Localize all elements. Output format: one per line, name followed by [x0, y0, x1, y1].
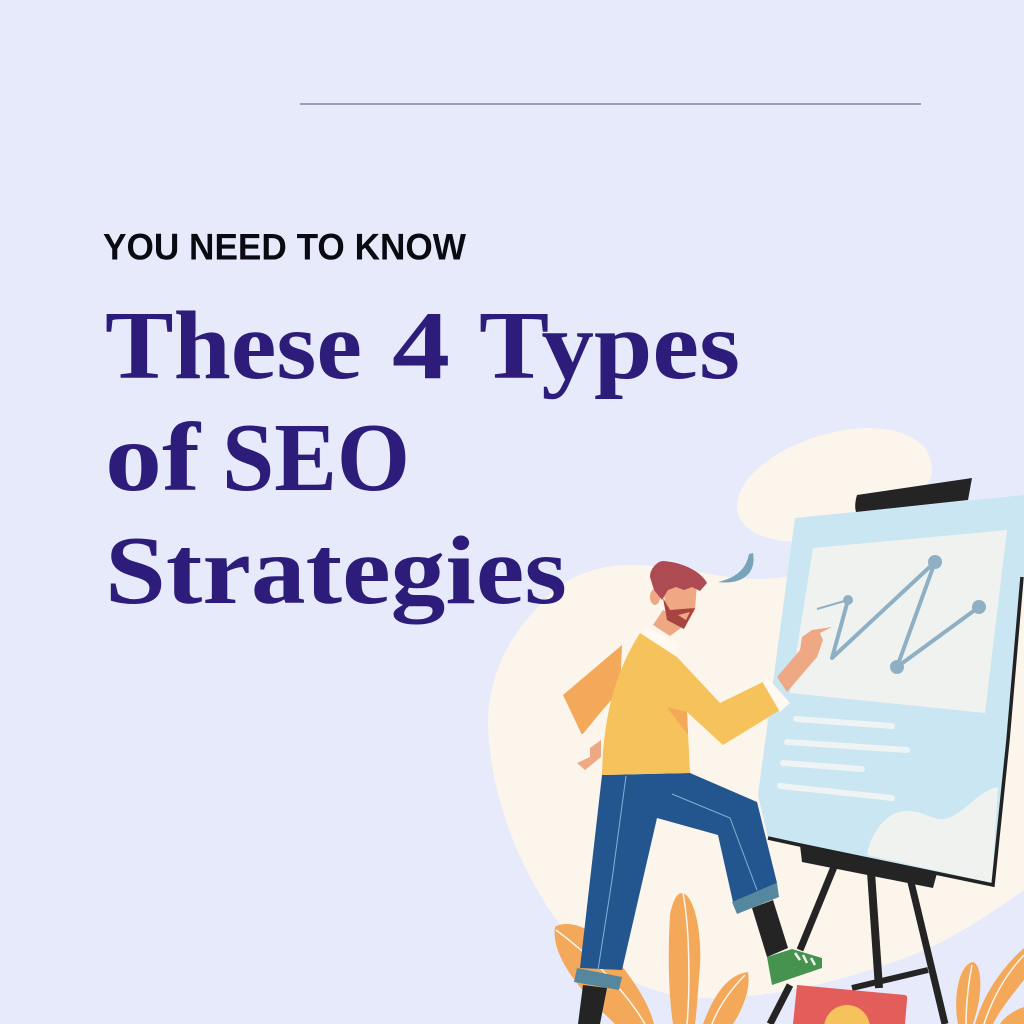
beard — [663, 598, 695, 629]
back leg — [578, 985, 607, 1024]
right forearm and pointing hand — [777, 627, 832, 692]
board sheet — [758, 495, 1024, 885]
collar — [640, 627, 677, 658]
illustration: easel legs — [770, 862, 945, 1024]
raised leg ankle — [752, 900, 788, 957]
back arm — [563, 645, 622, 735]
title: Types — [479, 292, 740, 400]
illustration: man — [563, 561, 832, 1024]
illustration: speech swoosh — [718, 553, 754, 583]
left cuff — [580, 726, 603, 750]
line chart — [817, 555, 986, 674]
title — [105, 292, 740, 625]
hair — [650, 561, 707, 600]
title: of — [105, 404, 202, 512]
cloud shape on board — [867, 787, 998, 883]
title: These — [105, 292, 362, 400]
sweater shadow — [667, 707, 688, 735]
eyebrow heading: YOU NEED TO KNOW — [103, 226, 467, 268]
illustration: plants — [555, 893, 1024, 1024]
illustration: background blobs — [488, 428, 1024, 998]
jeans cuffs — [574, 883, 779, 990]
title: 4 — [392, 292, 450, 400]
title: Strategies — [105, 517, 567, 625]
ear — [650, 589, 660, 605]
title: SEO — [222, 404, 410, 512]
board frame edge — [768, 577, 1022, 885]
shoe — [767, 949, 822, 985]
mouth — [678, 612, 690, 620]
illustration: red box with sun — [793, 985, 907, 1024]
face — [662, 583, 697, 628]
illustration: presentation board — [758, 478, 1024, 888]
easel tray — [800, 845, 937, 888]
text lines on board — [780, 719, 907, 798]
chart panel — [790, 530, 1007, 713]
jeans — [580, 773, 777, 970]
left hand — [577, 740, 601, 770]
neck — [653, 610, 685, 636]
right cuff — [763, 677, 790, 712]
board clip — [855, 478, 972, 512]
sweater — [602, 633, 780, 775]
